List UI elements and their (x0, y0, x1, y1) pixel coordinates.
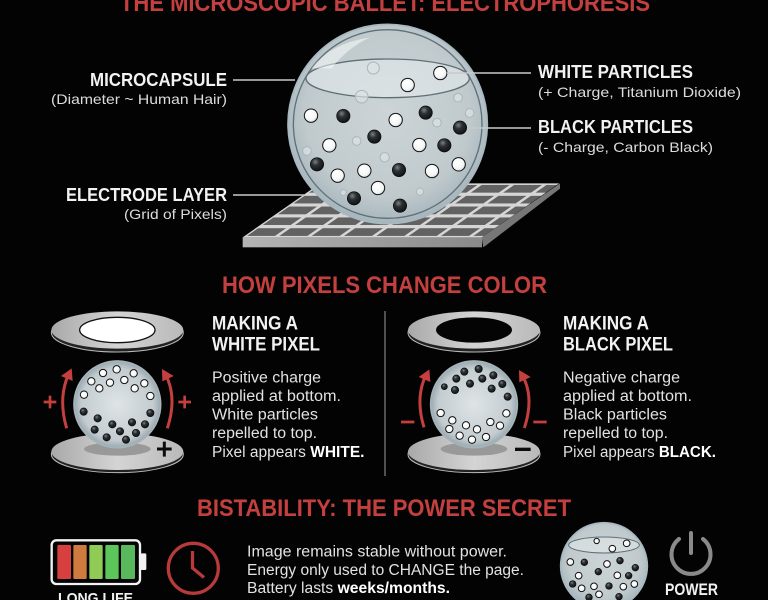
faint bubbles (303, 62, 474, 196)
black particles (310, 106, 467, 212)
label: electrode layer (66, 185, 304, 222)
panel: black pixel diagram (401, 311, 547, 473)
text: making a white pixel: MAKING A (212, 314, 298, 334)
label: black particles: BLACK PARTICLES (538, 117, 693, 137)
capsule (74, 361, 161, 448)
label: microcapsule: (Diameter ~ Human Hair) (51, 91, 227, 107)
text: making a black pixel: MAKING A (563, 314, 649, 334)
plus signs (44, 396, 191, 408)
text: making a black pixel: Pixel appears BLACK. (563, 444, 716, 461)
text: making a white pixel: Pixel appears WHITE. (212, 444, 364, 461)
bottom plate with minus (408, 433, 540, 473)
minus signs (401, 418, 547, 426)
highlight (312, 37, 370, 68)
bottom plate with plus (51, 433, 183, 473)
text: bistability explanation: Energy only used to CHANGE the page. (247, 562, 524, 579)
text: making a black pixel: Black particles (563, 406, 667, 424)
arrow right (519, 370, 531, 428)
label: black particles: (- Charge, Carbon Black) (538, 139, 713, 155)
text: making a white pixel: White particles (212, 406, 318, 424)
label: microcapsule: MICROCAPSULE (90, 70, 227, 90)
electrode layer grid (243, 183, 560, 247)
text: making a black pixel: BLACK PIXEL (563, 334, 673, 356)
label: white particles: (+ Charge, Titanium Dioxide) (538, 84, 741, 100)
text: making a black pixel: repelled to top. (563, 425, 668, 442)
top plate with white display (51, 311, 183, 352)
panel: white pixel diagram (44, 311, 191, 473)
arrow left (61, 368, 73, 428)
text: making a white pixel: Positive charge (212, 370, 321, 386)
text: bistability explanation (247, 544, 524, 597)
icon: clock (168, 543, 218, 593)
arrow left (419, 369, 430, 427)
heading: bistability: BISTABILITY: THE POWER SECRET (197, 495, 571, 522)
divider (384, 311, 386, 476)
label: power off: POWER (665, 580, 718, 599)
label: electrode layer: (Grid of Pixels) (124, 206, 227, 222)
label: microcapsule (51, 70, 295, 107)
arrow right (162, 369, 174, 428)
top plate with black display (408, 311, 540, 352)
microcapsule sphere (288, 24, 487, 224)
label: white particles: WHITE PARTICLES (538, 62, 693, 82)
text: making a black pixel: applied at bottom. (563, 388, 692, 405)
text: making a white pixel: repelled to top. (212, 425, 317, 442)
text: making a white pixel: WHITE PIXEL (212, 334, 320, 356)
label: electrode layer: ELECTRODE LAYER (66, 185, 227, 205)
text: making a white pixel: applied at bottom. (212, 388, 341, 405)
heading: how pixels change color: HOW PIXELS CHANGE COLOR (222, 272, 547, 299)
icon: power off (672, 533, 710, 574)
text: making a black pixel (563, 314, 716, 461)
icon: battery (52, 540, 146, 584)
label: black particles (467, 117, 713, 155)
water surface (306, 59, 469, 98)
text: making a white pixel (212, 314, 364, 461)
text: bistability explanation: Battery lasts weeks/months. (247, 580, 450, 597)
icon: small capsule (561, 523, 647, 600)
text: bistability explanation: Image remains stable without power. (247, 544, 507, 560)
capsule (431, 361, 517, 448)
text: making a black pixel: Negative charge (563, 370, 680, 386)
label: white particles (447, 62, 741, 100)
white particles (304, 66, 465, 195)
